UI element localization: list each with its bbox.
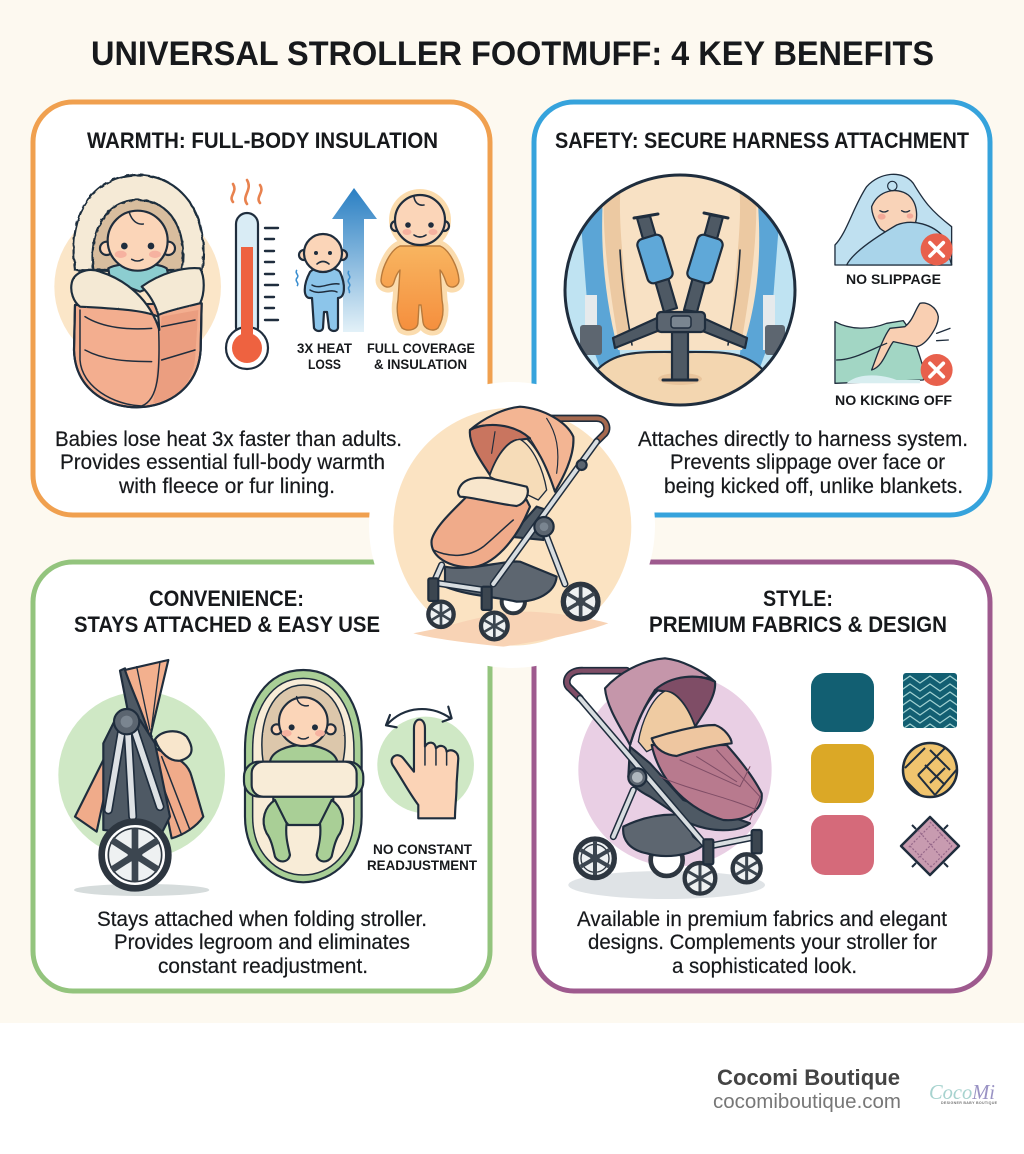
text: style body: Available in premium fabrics and elegant: [577, 907, 947, 931]
text: safety body: Prevents slippage over face or: [670, 450, 945, 474]
icon: warm baby: [381, 189, 459, 330]
heading: style: PREMIUM FABRICS & DESIGN: [649, 612, 947, 637]
icon: rising arrow: [332, 188, 377, 332]
footer website: cocomiboutique.com: [713, 1091, 901, 1113]
icon: thermometer: [226, 180, 278, 369]
panel: safety: [534, 102, 990, 515]
heading: safety: SAFETY: SECURE HARNESS ATTACHMENT: [555, 128, 970, 153]
text: style body: a sophisticated look.: [672, 954, 857, 978]
swatch: teal: [811, 673, 874, 732]
labels: no constant readjustment: READJUSTMENT: [367, 857, 477, 873]
heading: warmth: WARMTH: FULL-BODY INSULATION: [87, 128, 438, 153]
heading: style: STYLE:: [763, 586, 833, 611]
footer band: [0, 1023, 1024, 1154]
icon: folded stroller: [58, 660, 225, 896]
footer brand name: Cocomi Boutique: [717, 1065, 900, 1090]
text: convenience body: Stays attached when folding stroller.: [97, 907, 427, 931]
icon: premium stroller: [567, 658, 772, 899]
panel: warmth: [33, 102, 490, 515]
icon: hand with arrow: [377, 707, 474, 818]
text: safety body: being kicked off, unlike blankets.: [664, 474, 963, 498]
swatch: mustard: [811, 744, 874, 803]
text: convenience body: Provides legroom and eliminates: [114, 930, 410, 954]
icon: no slippage: [835, 174, 953, 265]
label: no kicking off: NO KICKING OFF: [835, 392, 952, 408]
labels: warmth icons: LOSS: [308, 356, 341, 372]
text: safety body: Attaches directly to harness system.: [638, 427, 968, 451]
text: warmth body: Provides essential full-body warmth: [60, 450, 385, 474]
labels: warmth icons: FULL COVERAGE: [367, 340, 475, 356]
text: convenience body: [97, 907, 427, 978]
icon: baby in footmuff top view: [244, 670, 363, 882]
heading: style: [649, 586, 947, 637]
labels: no constant readjustment: [367, 841, 477, 873]
icon: cold baby: [296, 234, 350, 331]
heading: convenience: CONVENIENCE:: [149, 586, 304, 611]
swatch: basket weave fabric: [903, 743, 958, 800]
heading: convenience: [74, 586, 380, 637]
swatch: rose: [811, 815, 874, 875]
text: style body: designs. Complements your stroller for: [588, 930, 937, 954]
panel: convenience: [33, 562, 490, 991]
text: convenience body: constant readjustment.: [158, 954, 368, 978]
icon: no kicking off: [835, 303, 953, 386]
text: warmth body: [55, 427, 402, 498]
heading: convenience: STAYS ATTACHED & EASY USE: [74, 612, 380, 637]
text: warmth body: with fleece or fur lining.: [118, 474, 335, 498]
labels: warmth icons: & INSULATION: [374, 356, 467, 372]
title: UNIVERSAL STROLLER FOOTMUFF: 4 KEY BENEFITS: [91, 35, 934, 73]
labels: warmth icons: [297, 340, 475, 372]
swatch: herringbone fabric: [903, 673, 957, 728]
text: style body: [577, 907, 947, 978]
swatch: quilted diamond fabric: [901, 817, 959, 875]
text: safety body: [638, 427, 968, 498]
panel: style: [534, 562, 990, 991]
labels: no constant readjustment: NO CONSTANT: [373, 841, 472, 857]
icon: harness circle: [565, 170, 795, 410]
center stroller badge: [369, 382, 655, 668]
footer logo: DESIGNER BABY BOUTIQUE: [941, 1101, 998, 1105]
icon: baby in footmuff: [54, 175, 221, 407]
label: no slippage: NO SLIPPAGE: [846, 271, 941, 287]
text: warmth body: Babies lose heat 3x faster than adults.: [55, 427, 402, 451]
labels: warmth icons: 3X HEAT: [297, 340, 352, 356]
footer logo: CocoMi: [929, 1080, 995, 1104]
